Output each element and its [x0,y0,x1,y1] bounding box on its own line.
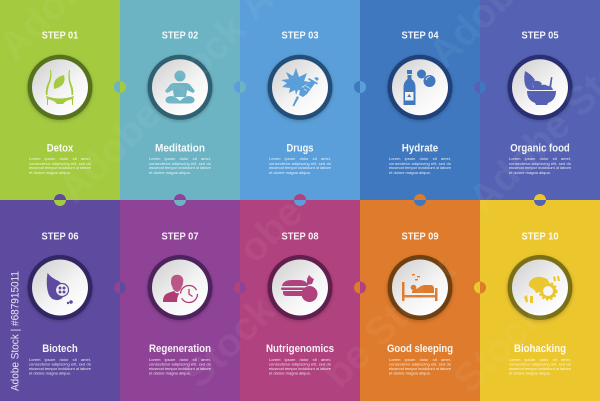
title: nutrigenomics: Nutrigenomics [266,343,334,355]
step label 02: STEP 02 [162,30,198,42]
panel: step 09 good sleeping [360,200,480,401]
divider connectors between panels [54,81,546,294]
step label 06: STEP 06 [42,231,79,242]
body text: Lorem ipsum dolor sit amet, [509,357,571,362]
body text: eiusmod tempor incididunt ut labore [389,165,452,170]
watermark text: be Stock [315,247,465,396]
body text: eiusmod tempor incididunt ut labore [509,366,572,371]
body text: consectetur adipiscing elit, sed do [509,161,572,166]
step label 05: STEP 05 [522,30,559,42]
body text [149,357,212,375]
body text: et dolore magna aliqua. [509,170,551,175]
body text: Lorem ipsum dolor sit amet, [149,357,211,362]
body text: eiusmod tempor incididunt ut labore [389,366,452,371]
body text: Lorem ipsum dolor sit amet, [269,156,331,161]
body text: consectetur adipiscing elit, sed do [269,361,332,366]
body text: consectetur adipiscing elit, sed do [389,161,452,166]
body text: et dolore magna aliqua. [509,370,551,375]
panel: step 10 biohacking [480,200,600,401]
title: good sleeping: Good sleeping [387,343,453,355]
body text [149,156,212,175]
title: detox: Detox [47,142,73,154]
badge: regeneration icon [147,255,213,322]
body text: consectetur adipiscing elit, sed do [509,361,572,366]
badge: detox icon [27,55,93,122]
badge: nutrigenomics icon [267,255,333,322]
body text [509,156,572,175]
body text: consectetur adipiscing elit, sed do [149,161,212,166]
title: hydrate: Hydrate [402,142,438,154]
body text: Lorem ipsum dolor sit amet, [269,357,331,362]
badge: biohacking icon [507,255,573,322]
badge: biotech icon [27,255,93,322]
body text: et dolore magna aliqua. [149,370,191,375]
watermark text: obe [230,190,312,271]
body text: Lorem ipsum dolor sit amet, [29,357,91,362]
body text: eiusmod tempor incididunt ut labore [149,366,212,371]
title: biotech: Biotech [42,343,78,355]
body text [269,156,332,175]
body text: consectetur adipiscing elit, sed do [149,361,212,366]
badge: hydrate icon [387,55,453,122]
body text: Lorem ipsum dolor sit amet, [509,156,571,161]
body text: consectetur adipiscing elit, sed do [389,361,452,366]
title: organic food: Organic food [510,142,570,154]
step label 07: STEP 07 [162,231,198,242]
panel: step 05 organic food [480,0,600,200]
step label 04: STEP 04 [402,30,439,42]
body text: eiusmod tempor incididunt ut labore [29,366,92,371]
watermark text: Adobe Stock [50,7,255,211]
panel: step 06 biotech [0,200,120,401]
body text: eiusmod tempor incididunt ut labore [149,165,212,170]
badge: good sleeping icon [387,255,453,322]
body text: et dolore magna aliqua. [29,370,71,375]
body text: Lorem ipsum dolor sit amet, [29,156,91,161]
body text: eiusmod tempor incididunt ut labore [269,366,332,371]
body text: Lorem ipsum dolor sit amet, [149,156,211,161]
panel: step 08 nutrigenomics [240,200,360,401]
body text: et dolore magna aliqua. [149,170,191,175]
step label 10: STEP 10 [522,231,558,242]
body text [29,357,92,375]
title: regeneration: Regeneration [149,343,211,355]
step label 01: STEP 01 [42,30,79,42]
title: drugs: Drugs [286,142,314,154]
body text: Lorem ipsum dolor sit amet, [389,357,451,362]
body text: eiusmod tempor incididunt ut labore [509,165,572,170]
body text [509,357,572,375]
step label 09: STEP 09 [402,231,439,242]
body text [389,156,452,175]
body text: eiusmod tempor incididunt ut labore [269,165,332,170]
body text [269,357,332,375]
badge: drugs icon [267,55,333,122]
body text: consectetur adipiscing elit, sed do [29,361,92,366]
panel: step 02 meditation [120,0,240,200]
body text: et dolore magna aliqua. [29,170,71,175]
body text: et dolore magna aliqua. [389,170,431,175]
body text: consectetur adipiscing elit, sed do [269,161,332,166]
badge: meditation icon [147,55,213,122]
vertical stock id label: Adobe Stock | #687915011 [10,271,22,391]
body text [389,357,452,375]
body text: et dolore magna aliqua. [269,370,311,375]
body text: eiusmod tempor incididunt ut labore [29,165,92,170]
step label 03: STEP 03 [282,30,319,42]
watermark text: Stock [445,293,554,401]
panel: step 01 detox [0,0,120,200]
title: biohacking: Biohacking [514,343,566,355]
panel: step 04 hydrate [360,0,480,200]
panel: step 03 drugs [240,0,360,200]
watermark text: Stock [175,288,284,396]
body text: et dolore magna aliqua. [389,370,431,375]
body text: consectetur adipiscing elit, sed do [29,161,92,166]
body text [29,156,92,175]
badge: organic food icon [507,55,573,122]
body text: et dolore magna aliqua. [269,170,311,175]
panel: step 07 regeneration [120,200,240,401]
step label 08: STEP 08 [282,231,319,242]
title: meditation: Meditation [155,142,205,154]
body text: Lorem ipsum dolor sit amet, [389,156,451,161]
